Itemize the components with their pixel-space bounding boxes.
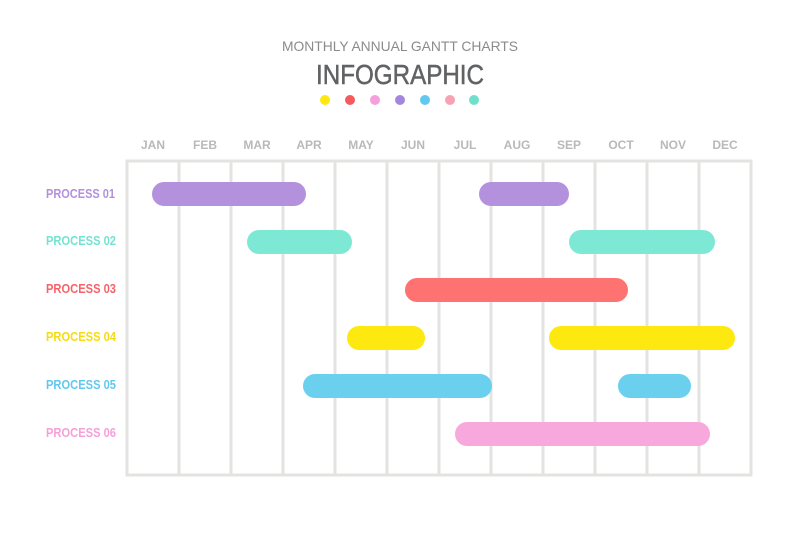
month labels: OCT	[608, 138, 634, 152]
month labels: NOV	[660, 138, 686, 152]
month labels: FEB	[193, 138, 217, 152]
process labels	[46, 186, 117, 440]
month labels	[141, 138, 738, 152]
bars	[152, 182, 735, 446]
month labels: JAN	[141, 138, 165, 152]
process labels: PROCESS 04	[46, 329, 117, 344]
grid	[127, 161, 751, 475]
month labels: APR	[296, 138, 322, 152]
month labels: DEC	[712, 138, 738, 152]
process labels: PROCESS 01	[46, 186, 115, 201]
month labels: JUN	[401, 138, 425, 152]
month labels: MAY	[348, 138, 374, 152]
month labels: AUG	[504, 138, 530, 152]
title: INFOGRAPHIC	[316, 59, 484, 90]
color dots	[320, 95, 479, 105]
process labels: PROCESS 03	[46, 281, 116, 296]
month labels: JUL	[454, 138, 476, 152]
month labels: MAR	[243, 138, 271, 152]
process labels: PROCESS 06	[46, 425, 116, 440]
process labels: PROCESS 02	[46, 233, 116, 248]
subtitle: MONTHLY ANNUAL GANTT CHARTS	[282, 38, 518, 54]
process labels: PROCESS 05	[46, 377, 116, 392]
month labels: SEP	[557, 138, 581, 152]
